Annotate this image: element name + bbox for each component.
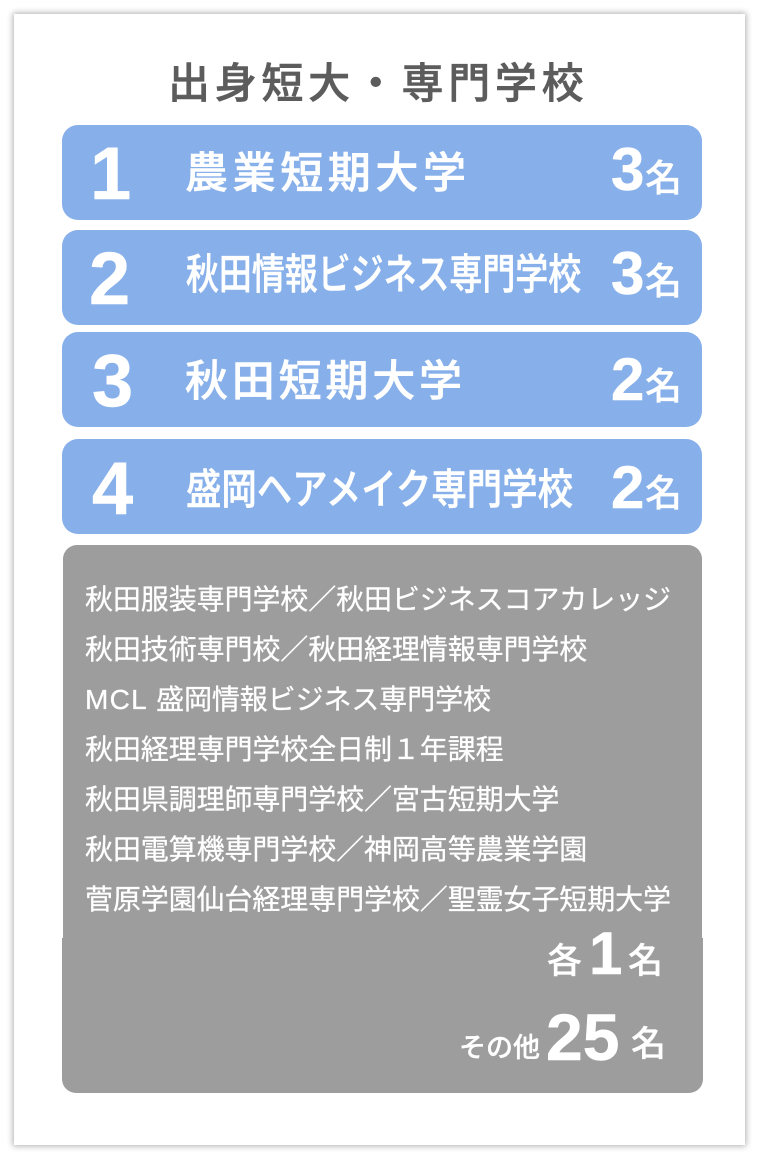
rank 1 count: 3 [611, 136, 644, 203]
school list line 1: 秋田服装専門学校／秋田ビジネスコアカレッジ [85, 584, 671, 615]
school list line 4: 秋田経理専門学校全日制１年課程 [85, 734, 504, 765]
rank 2 count: 3 [611, 240, 644, 307]
others count unit: 名 [631, 1025, 666, 1064]
rank 4 unit: 名 [645, 473, 682, 514]
rank 4 row [62, 439, 702, 534]
others count prefix: その他 [459, 1033, 540, 1063]
rank 3 unit: 名 [645, 366, 682, 407]
rank 1 school: 農業短期大学 [185, 150, 471, 198]
rank 1 number: 1 [90, 132, 131, 215]
school list line 3: MCL 盛岡情報ビジネス専門学校 [85, 684, 491, 715]
rank 3 count: 2 [611, 346, 644, 413]
each-one count unit: 名 [628, 942, 663, 981]
rank 4 school: 盛岡ヘアメイク専門学校 [186, 466, 573, 513]
rank 2 school: 秋田情報ビジネス専門学校 [186, 251, 581, 298]
rank 2 row [62, 230, 702, 325]
others count number: 25 [546, 1000, 619, 1074]
title: 出身短大・専門学校 [168, 60, 588, 107]
rank 2 unit: 名 [645, 261, 682, 302]
rank 1 unit: 名 [645, 158, 682, 199]
rank 3 row [62, 332, 702, 427]
school list line 2: 秋田技術専門校／秋田経理情報専門学校 [85, 634, 587, 665]
rank 4 number: 4 [92, 447, 133, 530]
rank 2 number: 2 [89, 237, 130, 320]
school list line 6: 秋田電算機専門学校／神岡高等農業学園 [85, 834, 587, 865]
rank 1 row [62, 125, 702, 220]
each-one count prefix: 各 [547, 942, 582, 981]
rank 3 school: 秋田短期大学 [185, 358, 466, 406]
each-one count number: 1 [589, 920, 622, 987]
school list line 7: 菅原学園仙台経理専門学校／聖霊女子短期大学 [85, 884, 671, 915]
rank 4 count: 2 [611, 454, 644, 521]
school list line 5: 秋田県調理師専門学校／宮古短期大学 [85, 784, 559, 815]
panel: other schools [62, 545, 703, 1093]
rank 3 number: 3 [92, 339, 133, 422]
